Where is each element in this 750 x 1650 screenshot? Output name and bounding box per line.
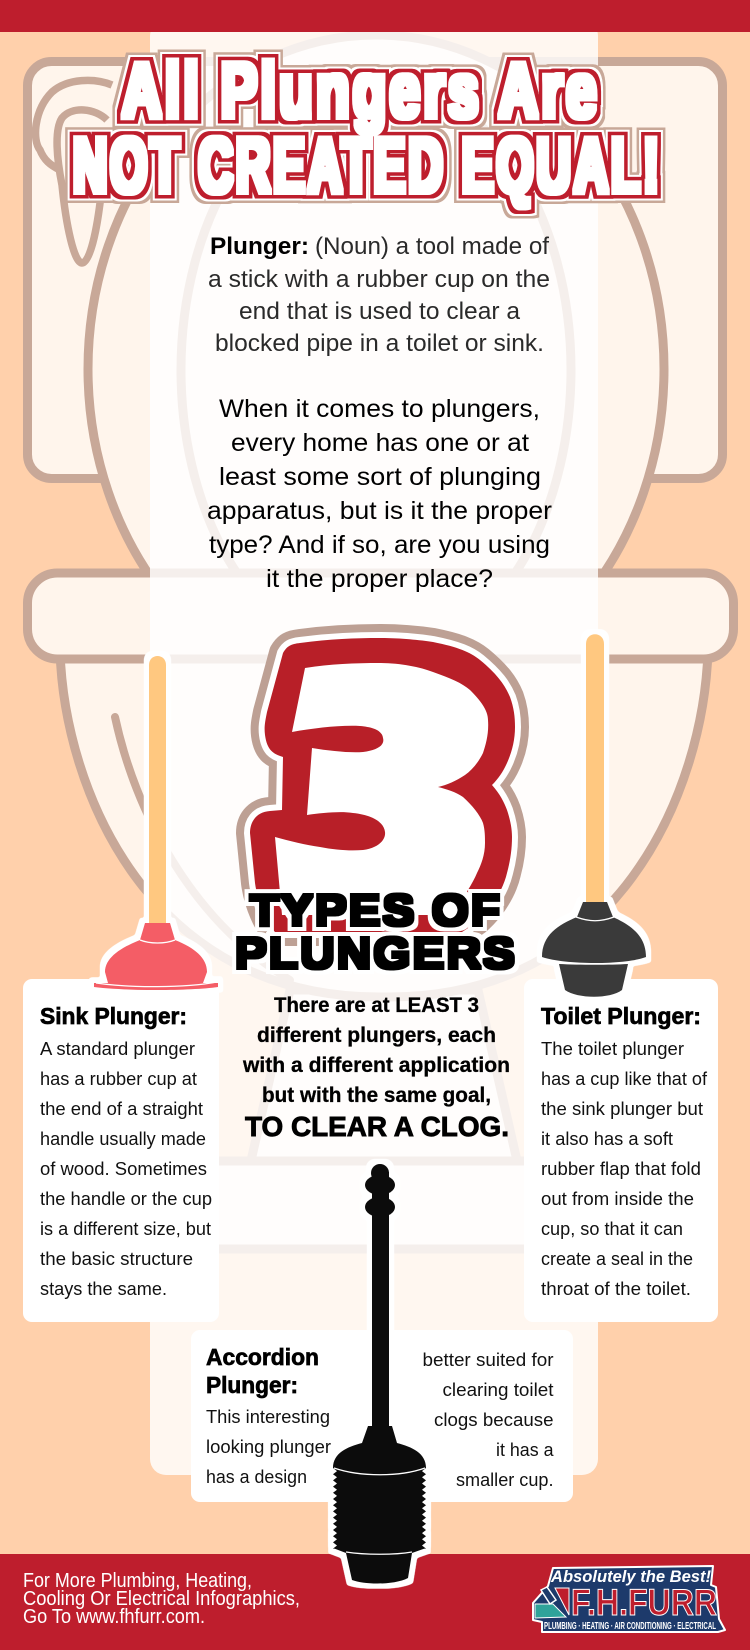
toilet plunger handle xyxy=(586,634,604,902)
number 3 white halo xyxy=(250,638,515,932)
definition paragraph xyxy=(208,233,550,357)
big number 3 xyxy=(250,638,515,932)
number 3 taupe outline xyxy=(250,638,515,932)
accordion plunger text left: looking plunger xyxy=(206,1436,331,1457)
toilet base xyxy=(140,1161,610,1249)
intro paragraph: least some sort of plunging xyxy=(219,463,541,491)
sink plunger flange xyxy=(94,983,218,990)
heading: types of plungers: TYPES OF xyxy=(250,886,502,935)
toilet bowl ellipse xyxy=(88,35,664,703)
accordion plunger upper seam xyxy=(334,1468,425,1475)
accordion plunger text left: This interesting xyxy=(206,1406,330,1427)
toilet illustration xyxy=(28,35,734,1249)
sink plunger rim xyxy=(96,982,217,987)
toilet flush handle inner drop xyxy=(57,110,107,263)
sink plunger text: A standard plunger xyxy=(40,1038,195,1059)
toilet bowl inner ellipse xyxy=(181,80,571,660)
top band xyxy=(0,0,750,32)
footer text xyxy=(23,1570,300,1628)
toilet pedestal xyxy=(250,990,518,1165)
toilet plunger text: the sink plunger but xyxy=(541,1098,703,1119)
sink plunger text: handle usually made xyxy=(40,1128,206,1149)
centre explanation: There are at LEAST 3 xyxy=(274,994,479,1017)
number 3 red body xyxy=(250,638,515,932)
toilet plunger text: create a seal in the xyxy=(541,1248,693,1269)
footer text: Go To www.fhfurr.com. xyxy=(23,1606,205,1628)
card: toilet plunger xyxy=(524,979,718,1322)
accordion plunger text left xyxy=(206,1344,331,1487)
sink plunger text: Sink Plunger: xyxy=(40,1003,187,1029)
accordion plunger text left: Accordion xyxy=(206,1344,319,1370)
logo icon: red roof xyxy=(555,1588,569,1615)
accordion plunger text right: smaller cup. xyxy=(456,1469,554,1490)
toilet plunger flap xyxy=(559,964,628,997)
intro paragraph: type? And if so, are you using xyxy=(209,531,550,559)
logo backing shape xyxy=(533,1566,725,1632)
definition paragraph: end that is used to clear a xyxy=(239,298,520,325)
card: sink plunger xyxy=(23,979,219,1322)
sink plunger text: has a rubber cup at xyxy=(40,1068,197,1089)
sink plunger text: the basic structure xyxy=(40,1248,193,1269)
heading: types of plungers: PLUNGERS xyxy=(235,929,517,978)
logo slogan text: Absolutely the Best! xyxy=(550,1567,711,1586)
sink plunger handle xyxy=(149,656,166,923)
accordion plunger ball lower xyxy=(365,1197,395,1217)
sink plunger text: the handle or the cup xyxy=(40,1188,212,1209)
centre explanation: different plungers, each xyxy=(257,1024,496,1047)
sink plunger text: of wood. Sometimes xyxy=(40,1158,207,1179)
toilet plunger text: out from inside the xyxy=(541,1188,694,1209)
sink plunger text: is a different size, but xyxy=(40,1218,211,1239)
sink plunger cup xyxy=(105,923,207,983)
accordion plunger bellows xyxy=(333,1468,426,1549)
intro paragraph: every home has one or at xyxy=(231,429,529,457)
accordion plunger text right: better suited for xyxy=(422,1349,554,1370)
toilet flush handle outer ring xyxy=(36,80,112,170)
toilet plunger text: Toilet Plunger: xyxy=(541,1003,701,1029)
toilet tank xyxy=(28,62,722,478)
accordion plunger text left: has a design xyxy=(206,1466,307,1487)
centre explanation xyxy=(242,994,510,1142)
toilet plunger seam xyxy=(576,917,614,921)
toilet plunger text: throat of the toilet. xyxy=(541,1278,691,1299)
accordion plunger text left: Plunger: xyxy=(206,1372,298,1398)
footer band xyxy=(0,1554,750,1650)
heading: types of plungers xyxy=(235,886,517,978)
footer text: For More Plumbing, Heating, xyxy=(23,1570,252,1592)
toilet seat xyxy=(28,573,734,659)
accordion plunger stem xyxy=(372,1172,389,1432)
toilet plunger cup xyxy=(542,902,646,963)
translucent centre column xyxy=(150,20,598,1475)
accordion plunger lower seam xyxy=(346,1552,412,1554)
logo name text: F.H.FURR xyxy=(571,1582,717,1623)
accordion plunger text right: clogs because xyxy=(434,1409,554,1430)
title xyxy=(73,46,662,209)
toilet plunger text: cup, so that it can xyxy=(541,1218,683,1239)
icon: accordion plunger xyxy=(333,1164,426,1584)
logo icon: teal house xyxy=(535,1604,566,1618)
accordion plunger neck and dome xyxy=(333,1426,426,1468)
toilet plunger text xyxy=(541,1003,708,1299)
sink plunger seam xyxy=(140,940,175,943)
accordion plunger knob xyxy=(371,1164,389,1182)
intro paragraph: it the proper place? xyxy=(266,565,493,593)
definition paragraph: (Noun) a tool made of xyxy=(315,233,549,260)
sink plunger text: stays the same. xyxy=(40,1278,167,1299)
toilet plunger text: rubber flap that fold xyxy=(541,1158,701,1179)
definition paragraph: blocked pipe in a toilet or sink. xyxy=(215,330,544,357)
logo icon: wrench xyxy=(541,1587,556,1604)
accordion plunger text right: it has a xyxy=(496,1439,554,1460)
toilet plunger text: has a cup like that of xyxy=(541,1068,708,1089)
accordion plunger ball top xyxy=(365,1175,395,1195)
centre explanation: TO CLEAR A CLOG. xyxy=(245,1111,509,1142)
toilet plunger text: it also has a soft xyxy=(541,1128,673,1149)
centre explanation: with a different application xyxy=(242,1054,510,1077)
definition paragraph: Plunger: xyxy=(210,233,309,260)
definition paragraph: a stick with a rubber cup on the xyxy=(208,266,550,293)
centre explanation: but with the same goal, xyxy=(262,1084,491,1107)
sink plunger text: the end of a straight xyxy=(40,1098,203,1119)
footer text: Cooling Or Electrical Infographics, xyxy=(23,1588,300,1610)
sink plunger text xyxy=(40,1003,212,1299)
toilet inner bowl line xyxy=(115,717,290,980)
icon: sink plunger xyxy=(94,656,218,990)
accordion plunger base xyxy=(333,1548,426,1584)
toilet lower bowl xyxy=(60,650,708,997)
icon: toilet plunger xyxy=(542,634,646,997)
accordion plunger text right xyxy=(422,1349,554,1490)
intro paragraph xyxy=(207,395,552,593)
accordion plunger text right: clearing toilet xyxy=(442,1379,554,1400)
toilet plunger text: The toilet plunger xyxy=(541,1038,684,1059)
card: accordion plunger xyxy=(191,1330,573,1502)
logo: F.H. Furr xyxy=(533,1566,725,1632)
intro paragraph: apparatus, but is it the proper xyxy=(207,497,552,525)
intro paragraph: When it comes to plungers, xyxy=(219,395,540,423)
